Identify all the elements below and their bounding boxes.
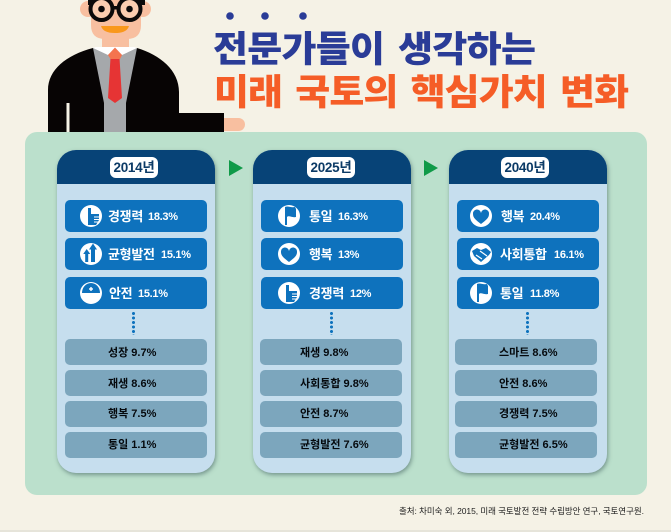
face — [91, 0, 141, 39]
row: 재생 — [65, 370, 207, 396]
row: 경쟁력: 경쟁력 7.5% — [499, 408, 558, 420]
arrow 2 — [424, 160, 438, 176]
header 2025: 2025년 — [311, 160, 351, 175]
arrow 1 — [229, 160, 243, 176]
row: 통일: 통일 — [500, 286, 523, 301]
row: 사회통합 — [457, 238, 599, 270]
row: 균형발전 — [260, 432, 402, 458]
header 2040 — [449, 150, 607, 184]
row: 안전: 15.1% — [138, 288, 168, 300]
row: 균형발전: 균형발전 7.6% — [300, 439, 369, 451]
row: 사회통합: 16.1% — [554, 249, 584, 261]
row: 통일 — [457, 277, 599, 309]
row: 사회통합: 사회통합 9.8% — [300, 378, 369, 390]
vest — [93, 48, 137, 132]
emphasis dots — [226, 12, 307, 20]
row: 균형발전 — [455, 432, 597, 458]
row: 행복: 13% — [338, 249, 359, 261]
row: 경쟁력: 12% — [350, 288, 371, 300]
hand — [215, 118, 245, 131]
row: 행복: 20.4% — [530, 211, 560, 223]
row: 통일: 11.8% — [530, 288, 559, 300]
row: 경쟁력 — [455, 401, 597, 427]
source note: 출처: 차미숙 외, 2015, 미래 국토발전 전략 수립방안 연구, 국토연구원. — [399, 506, 644, 516]
suit — [48, 48, 224, 132]
dotted connector — [132, 312, 135, 335]
row: 안전: 안전 — [109, 286, 132, 301]
row: 통일: 통일 — [309, 209, 332, 224]
row: 통일 — [65, 432, 207, 458]
header 2040: 2040년 — [505, 160, 545, 175]
row: 경쟁력: 경쟁력 — [309, 286, 344, 301]
row: 통일: 16.3% — [338, 211, 368, 223]
row: 행복: 행복 — [501, 209, 524, 224]
title line 2: 미래 국토의 핵심가치 변화 — [214, 73, 628, 113]
row: 스마트 — [455, 339, 597, 365]
panel: 2014 — [57, 150, 215, 473]
panel: 2040 — [449, 150, 607, 473]
illustration: man in a suit — [48, 0, 245, 132]
ears — [80, 1, 96, 17]
row: 경쟁력 — [261, 277, 403, 309]
row: 안전 — [65, 277, 207, 309]
header 2014 — [57, 150, 215, 184]
title — [213, 12, 628, 113]
panel: green background — [25, 132, 647, 495]
panel: 2025 — [253, 150, 411, 473]
row: 균형발전: 균형발전 — [108, 247, 155, 262]
row: 재생: 재생 8.6% — [108, 378, 156, 390]
row: 통일: 통일 1.1% — [108, 439, 156, 451]
header 2025 — [253, 150, 411, 184]
row: 성장 — [65, 339, 207, 365]
row: 성장: 성장 9.7% — [108, 347, 156, 359]
row: 균형발전: 균형발전 6.5% — [499, 439, 568, 451]
glasses — [90, 0, 112, 20]
tie — [108, 58, 122, 103]
row: 균형발전: 15.1% — [161, 249, 191, 261]
dotted connector — [526, 312, 528, 335]
row: 안전: 안전 8.7% — [300, 408, 348, 420]
dotted connector — [330, 312, 333, 335]
row: 재생: 재생 9.8% — [300, 347, 348, 359]
row: 스마트: 스마트 8.6% — [499, 347, 558, 359]
row: 통일 — [261, 200, 403, 232]
title line 1: 전문가들이 생각하는 — [213, 30, 535, 70]
row: 사회통합 — [260, 370, 402, 396]
row: 행복 — [457, 200, 599, 232]
row: 재생 — [260, 339, 402, 365]
row: 안전 — [260, 401, 402, 427]
row: 균형발전 — [65, 238, 207, 270]
row: 경쟁력 — [65, 200, 207, 232]
collar — [93, 47, 137, 55]
row: 경쟁력: 경쟁력 — [108, 209, 143, 224]
row: 안전 — [455, 370, 597, 396]
row: 안전: 안전 8.6% — [499, 378, 547, 390]
row: 행복: 행복 — [309, 247, 332, 262]
row: 행복 — [65, 401, 207, 427]
row: 행복: 행복 7.5% — [108, 408, 156, 420]
row: 행복 — [261, 238, 403, 270]
header 2014: 2014년 — [114, 160, 154, 175]
row: 경쟁력: 18.3% — [148, 211, 178, 223]
row: 사회통합: 사회통합 — [500, 247, 547, 262]
mouth — [101, 26, 129, 33]
hair — [88, 0, 93, 5]
